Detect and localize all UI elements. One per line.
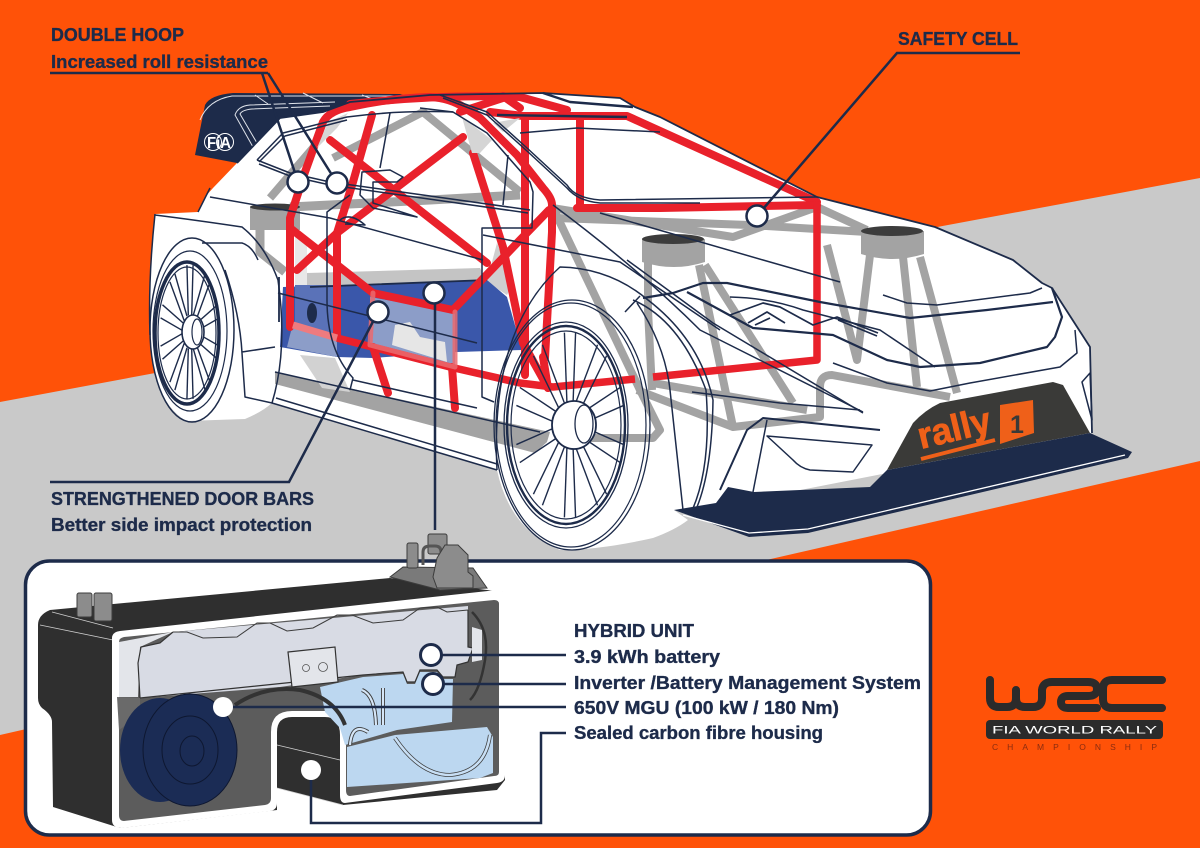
hybrid leader line from car to unit — [424, 282, 444, 530]
red roll cage — [290, 96, 817, 408]
light patches at cage joints — [317, 113, 520, 153]
front wheel — [494, 300, 650, 550]
callout: double hoop: Increased roll resistance — [51, 51, 268, 72]
WRC logo — [986, 680, 1163, 752]
panel: hybrid unit — [26, 534, 930, 835]
grey suspension towers — [250, 204, 924, 267]
callout: safety cell: SAFETY CELL — [898, 28, 1018, 49]
callout: safety cell — [746, 28, 1020, 226]
car outlines — [150, 93, 1092, 515]
rear spoiler with FIA badge — [195, 93, 420, 163]
hybrid unit labels: 650V MGU (100 kW / 180 Nm) — [574, 698, 839, 718]
callout: double hoop — [50, 24, 348, 194]
callout: strengthened door bars: STRENGTHENED DOOR BARS — [51, 488, 314, 509]
grey structural frame — [260, 112, 957, 438]
grey sill — [275, 372, 550, 453]
hybrid unit labels — [574, 621, 921, 743]
top connectors — [77, 534, 487, 621]
callout: strengthened door bars — [50, 302, 388, 535]
car body silhouette — [150, 93, 1092, 550]
hybrid unit labels: HYBRID UNIT — [574, 621, 694, 641]
rally1 grille panel — [887, 382, 1090, 470]
battery housing illustration — [38, 578, 505, 828]
rear spoiler with FIA badge: FiA — [207, 135, 231, 152]
hybrid unit labels: 3.9 kWh battery — [574, 647, 720, 667]
callout points — [213, 644, 566, 823]
callout: strengthened door bars: Better side impact protection — [51, 514, 312, 535]
hybrid unit labels: Inverter /Battery Management System — [574, 673, 921, 693]
rally1 grille panel: rally — [913, 400, 995, 457]
rally1 grille panel: 1 — [1010, 411, 1024, 439]
callout: double hoop: DOUBLE HOOP — [51, 24, 184, 45]
hybrid unit labels: Sealed carbon fibre housing — [574, 723, 823, 743]
WRC logo: CHAMPIONSHIP — [992, 742, 1157, 752]
grey diagonal band — [0, 178, 1200, 735]
front splitter — [674, 433, 1132, 537]
car illustration — [150, 93, 1132, 550]
WRC logo: FIA WORLD RALLY — [992, 724, 1158, 736]
blue floor panel — [279, 237, 522, 392]
rear wheel — [150, 238, 234, 422]
